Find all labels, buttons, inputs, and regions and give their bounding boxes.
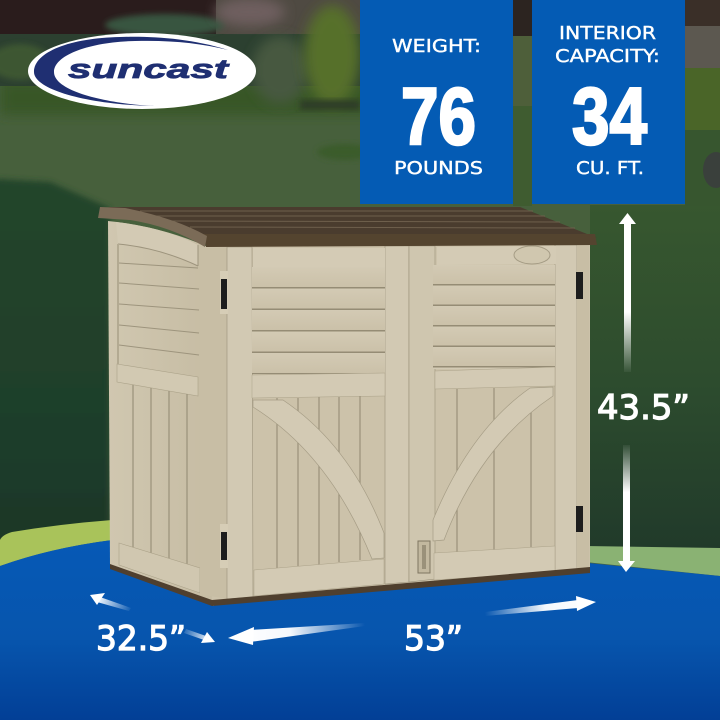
right door bottom band xyxy=(434,546,555,580)
side louvers xyxy=(118,244,199,365)
shed front wall xyxy=(205,243,590,603)
arrow: height upward xyxy=(619,213,636,372)
roof front edge xyxy=(204,234,597,247)
panel: weight: POUNDS xyxy=(394,158,483,179)
panel: interior capacity: INTERIOR xyxy=(559,23,656,44)
arrow: depth front xyxy=(184,629,215,643)
right door top band with logo xyxy=(437,246,556,265)
logo: suncast: suncast xyxy=(68,54,230,84)
left door louvers xyxy=(252,267,385,374)
left door arch brace xyxy=(253,400,384,559)
door latch xyxy=(418,541,430,573)
arrow: height downward xyxy=(618,445,635,572)
arrow: depth back xyxy=(90,593,131,611)
shed product xyxy=(98,207,597,606)
green ground band right xyxy=(585,546,720,576)
right door arch brace xyxy=(433,387,553,541)
right door boards xyxy=(457,388,531,552)
center post xyxy=(385,246,409,584)
green ground band left xyxy=(0,520,130,566)
left door boards xyxy=(277,396,360,570)
side arched top panel xyxy=(116,222,198,266)
panel: interior capacity: CAPACITY: xyxy=(555,46,660,67)
right door middle band xyxy=(435,367,555,389)
left door top band xyxy=(253,248,385,267)
left door stile xyxy=(227,247,253,599)
label: width 53: 53” xyxy=(404,619,463,659)
side middle band xyxy=(117,364,198,396)
panel: interior capacity xyxy=(532,0,685,204)
logo: suncast xyxy=(28,33,256,109)
right stile and post xyxy=(555,245,577,574)
side bottom band xyxy=(119,543,200,593)
panel: weight: 76 xyxy=(401,72,476,162)
corner post xyxy=(200,247,227,599)
panel: interior capacity: 34 xyxy=(572,72,647,162)
roof side edge xyxy=(98,207,207,247)
arrow: width right xyxy=(485,596,596,616)
arrow: width left xyxy=(228,623,365,645)
shed side wall xyxy=(108,221,214,606)
left door bottom band xyxy=(254,559,384,596)
roof ridges xyxy=(140,211,575,228)
hinges xyxy=(220,271,583,568)
side boards xyxy=(133,385,187,565)
label: height 43.5: 43.5” xyxy=(597,388,690,428)
label: depth 32.5: 32.5” xyxy=(96,619,186,659)
base trim xyxy=(110,564,590,606)
panel: weight: WEIGHT: xyxy=(392,36,481,57)
right door stile xyxy=(409,246,435,582)
roof top surface xyxy=(108,207,597,238)
panel: weight xyxy=(360,0,513,204)
left door middle band xyxy=(252,373,385,398)
right door louvers xyxy=(433,265,555,369)
blue floor xyxy=(0,540,720,720)
panel: interior capacity: CU. FT. xyxy=(576,158,644,179)
